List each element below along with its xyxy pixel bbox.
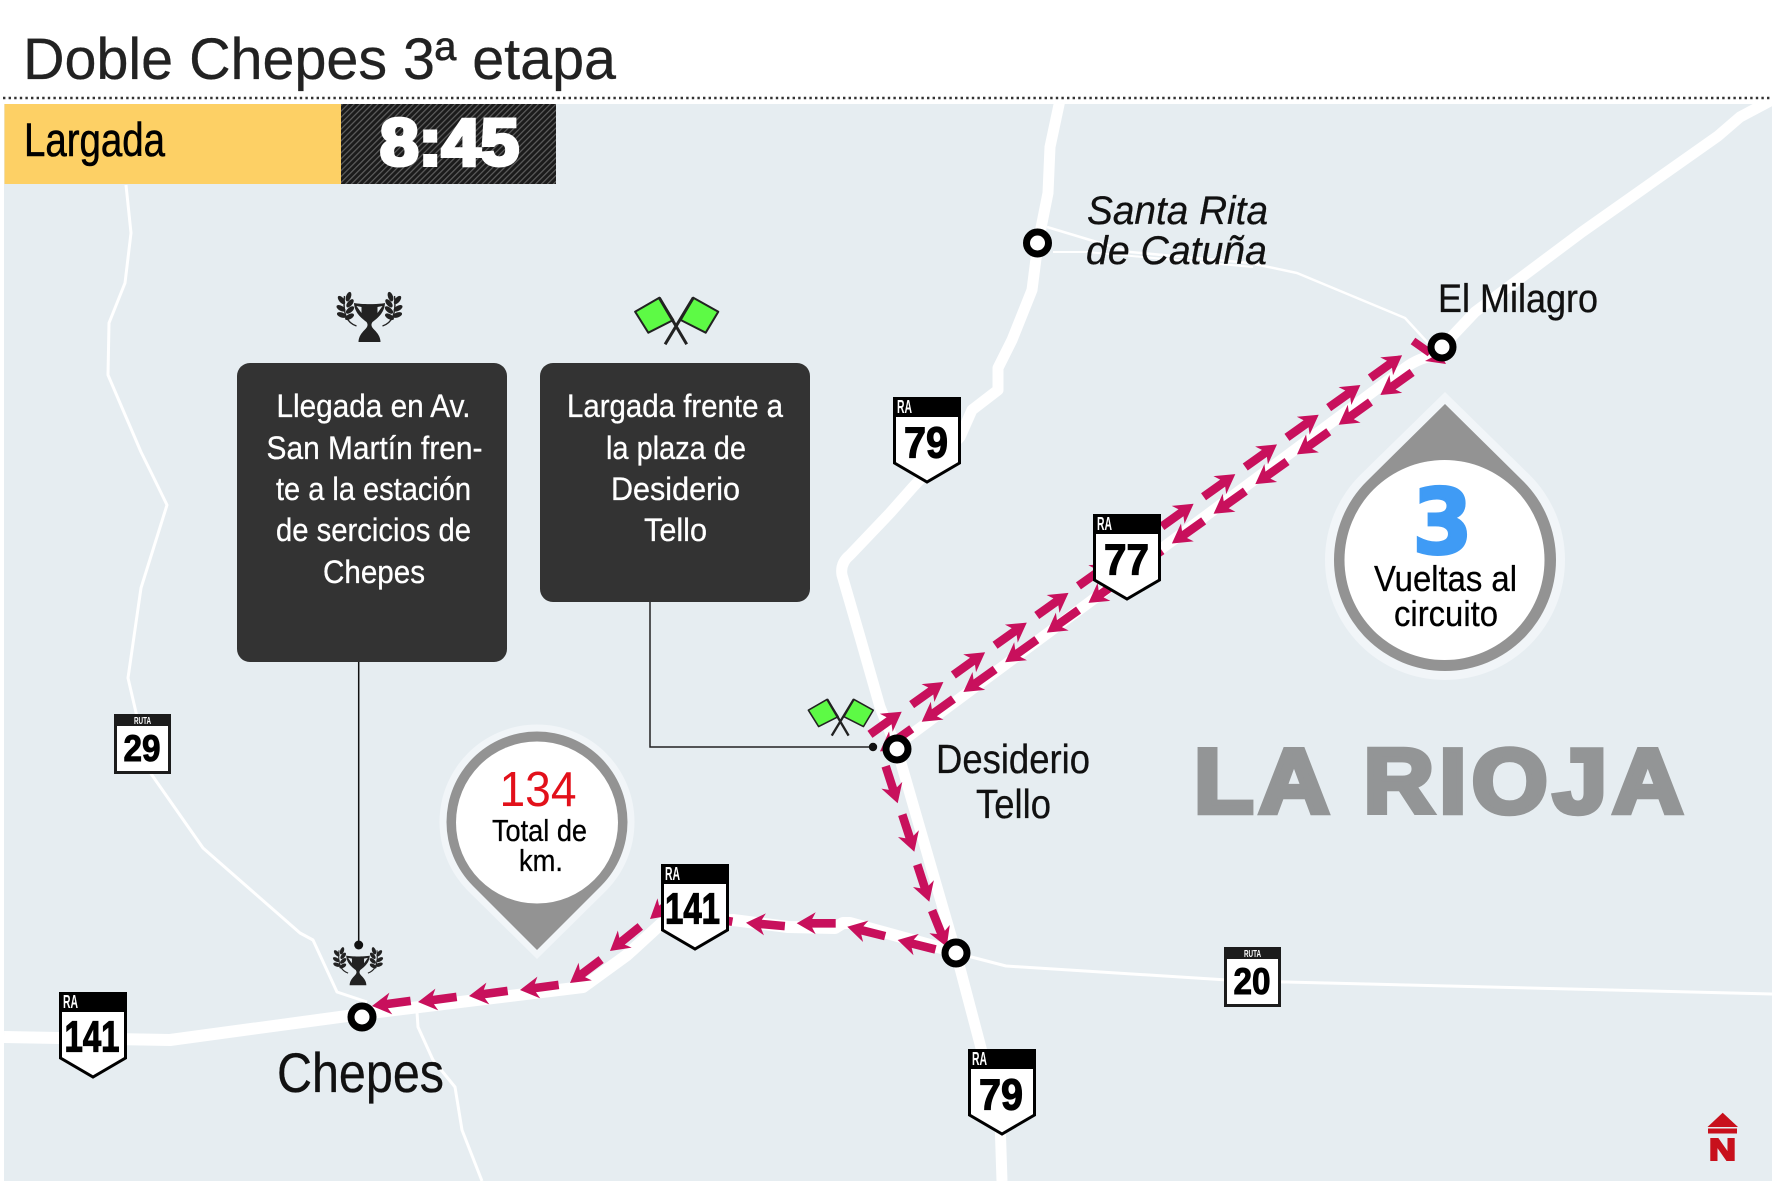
logo: N (1709, 1132, 1736, 1167)
arrow turning at El Milagro (1413, 341, 1446, 364)
marker: junction (945, 942, 967, 964)
start text: Desiderio (611, 471, 740, 507)
road sign: ruta 29: RUTA (134, 715, 151, 727)
road shield: RA 141 centre: 141 (665, 884, 720, 934)
start label panel (4, 104, 342, 184)
start time: 8:45 (380, 105, 519, 179)
label: Chepes: Chepes (277, 1041, 444, 1104)
icon: small trophy at Chepes (332, 947, 384, 985)
road sign: ruta 20: RUTA (1244, 948, 1261, 960)
province label: LA RIOJA (1194, 730, 1683, 832)
finish text: San Martín fren- (266, 430, 482, 466)
laps label: Vueltas al (1374, 558, 1517, 599)
finish text: te a la estación (276, 471, 471, 507)
label: Desiderio Tello: Tello (976, 781, 1051, 827)
icon: trophy above finish panel (335, 291, 404, 342)
laps number: 3 (1412, 470, 1472, 575)
secondary roads (108, 185, 1772, 1181)
title: Doble Chepes 3ª etapa (23, 27, 617, 92)
laps label (1374, 558, 1517, 634)
start text: Largada frente a (567, 388, 783, 424)
road shield: RA 77 (1093, 514, 1161, 599)
leader line: finish (354, 662, 363, 950)
road sign: ruta 29 (114, 714, 171, 772)
label: El Milagro: El Milagro (1438, 277, 1598, 321)
road shield: RA 77: RA (1097, 514, 1112, 534)
panel: finish location (237, 363, 507, 662)
panel: start location (540, 363, 810, 602)
icon: small flags at Desiderio Tello (808, 699, 873, 736)
road shield: RA 141 west (59, 992, 127, 1077)
route arrows: Desiderio to junction (875, 763, 957, 951)
distance label: Total de (492, 813, 587, 848)
pin: laps (1325, 392, 1565, 680)
logo (1708, 1113, 1738, 1167)
route arrows: outbound to El Milagro (864, 346, 1408, 743)
finish text (266, 388, 482, 590)
distance number: 134 (500, 763, 576, 817)
start text: la plaza de (606, 430, 746, 466)
road shield: RA 79 north: RA (897, 397, 912, 417)
laps label: circuito (1394, 593, 1498, 634)
label: Desiderio Tello: Desiderio (936, 736, 1090, 782)
road sign: ruta 20: 20 (1234, 961, 1270, 1002)
marker: Santa Rita de Catuña (1026, 232, 1048, 254)
distance label: km. (519, 843, 563, 878)
icon: green flags above start panel (635, 298, 718, 344)
label: Santa Rita de Catuña (1086, 189, 1268, 273)
distance label (492, 813, 587, 878)
start time bar (4, 104, 556, 184)
road shield: RA 141 west: 141 (64, 1012, 120, 1062)
road shield: RA 141 centre (661, 864, 729, 949)
road shield: RA 79 south: RA (972, 1049, 987, 1069)
leader line: start (650, 602, 877, 751)
marker: El Milagro (1431, 336, 1453, 358)
start time panel (341, 104, 556, 184)
route arrows: return to Desiderio (874, 363, 1419, 760)
road sign: ruta 20 (1224, 947, 1281, 1006)
label: Santa Rita de Catuña: Santa Rita (1087, 189, 1268, 233)
finish text: Llegada en Av. (276, 388, 470, 424)
road shield: RA 79 south (968, 1049, 1036, 1134)
marker: Desiderio Tello (886, 738, 908, 760)
road shield: RA 141 centre: RA (665, 864, 680, 884)
dotted divider (3, 97, 1772, 99)
start text: Tello (644, 512, 707, 548)
label: Santa Rita de Catuña: de Catuña (1086, 229, 1267, 273)
road shield: RA 79 north (893, 397, 961, 482)
label: Desiderio Tello (936, 736, 1090, 827)
finish text: Chepes (323, 554, 425, 590)
road shield: RA 79 north: 79 (904, 418, 948, 468)
road shield: RA 141 west: RA (63, 992, 78, 1012)
start label: Largada (24, 113, 166, 166)
finish text: de sercicios de (276, 512, 471, 548)
road sign: ruta 29: 29 (124, 728, 160, 769)
road shield: RA 79 south: 79 (979, 1070, 1023, 1120)
route arrows: Chepes road (371, 886, 938, 1017)
marker: Chepes (351, 1006, 373, 1028)
pin: total km (440, 725, 634, 959)
start text (567, 388, 783, 548)
road shield: RA 77: 77 (1104, 536, 1149, 584)
